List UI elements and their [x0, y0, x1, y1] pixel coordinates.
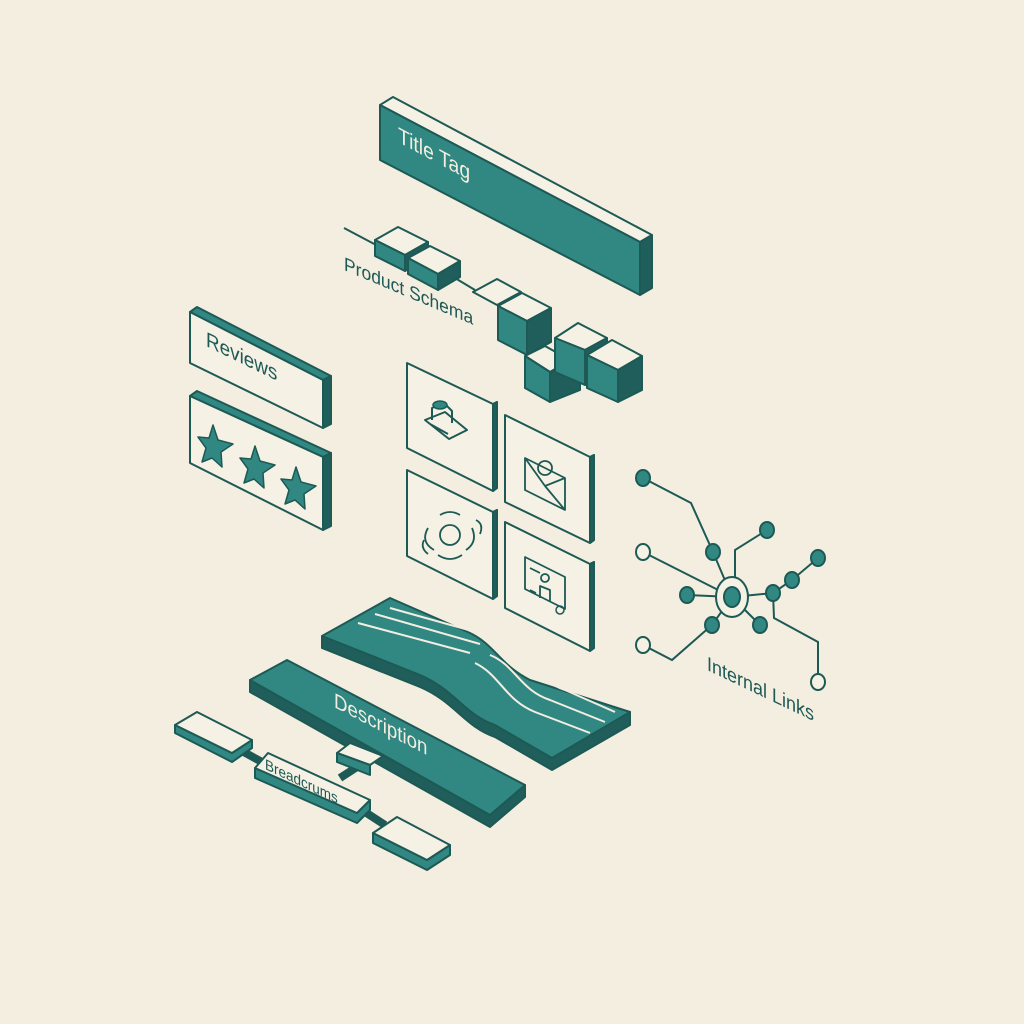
tile 4: person card: [505, 522, 594, 651]
cube E: [525, 346, 580, 402]
icon tiles: [407, 363, 594, 651]
title tag label: Title Tag: [398, 122, 470, 186]
cube G: [587, 340, 642, 402]
tile 3: swirl: [407, 470, 497, 599]
internal links label: Internal Links: [707, 653, 814, 726]
cube D: [498, 293, 551, 355]
title tag bar: [380, 97, 652, 295]
stars: [198, 425, 316, 509]
reviews card: [190, 307, 331, 428]
description bar: [250, 660, 525, 827]
right crumb: [373, 817, 450, 870]
reviews label: Reviews: [206, 328, 277, 386]
breadcrumbs label box: [255, 753, 370, 823]
product schema label: Product Schema: [344, 254, 474, 330]
product schema: [344, 227, 642, 402]
stars card: [190, 391, 331, 530]
description label: Description: [334, 689, 427, 760]
wavy content band: [322, 598, 630, 770]
tile 1: product: [407, 363, 497, 491]
cube F: [555, 323, 607, 385]
breadcrumbs: [175, 712, 450, 870]
cube B: [408, 246, 460, 290]
breadcrumbs label box: Breadcrums: [265, 756, 338, 808]
internal links network: [636, 470, 825, 726]
connector crumb: [337, 743, 383, 775]
cube A: [375, 227, 428, 271]
tile 2: image: [505, 415, 594, 543]
left crumb: [175, 712, 252, 762]
cube C outline: [473, 279, 521, 305]
